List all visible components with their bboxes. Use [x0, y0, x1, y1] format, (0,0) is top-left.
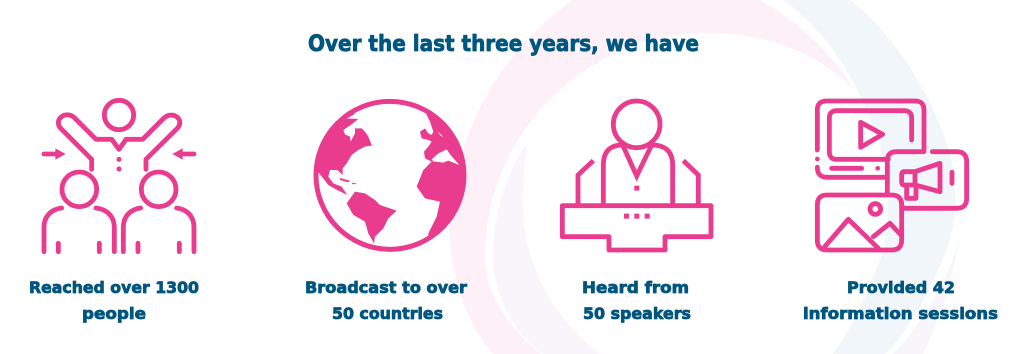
icon: media sessions — [815, 101, 967, 250]
caption: speakers — [582, 278, 691, 323]
caption: information sessions — [803, 278, 998, 323]
caption: countries — [305, 278, 467, 323]
caption: people reached: people — [82, 304, 146, 323]
icon: crowd of people — [44, 100, 194, 252]
title: Over the last three years, we have — [308, 32, 699, 57]
caption: speakers: 50 speakers — [583, 304, 691, 323]
caption: people reached — [29, 278, 199, 323]
caption: people reached: Reached over 1300 — [29, 278, 199, 297]
icon: globe — [316, 101, 464, 249]
caption: countries: Broadcast to over — [305, 278, 467, 297]
caption: information sessions: Provided 42 — [847, 278, 955, 297]
caption: information sessions: information sessions — [803, 304, 998, 323]
icon: speaker at podium — [562, 101, 711, 250]
caption: speakers: Heard from — [582, 278, 689, 297]
caption: countries: 50 countries — [332, 304, 443, 323]
background swirl — [450, 0, 960, 354]
